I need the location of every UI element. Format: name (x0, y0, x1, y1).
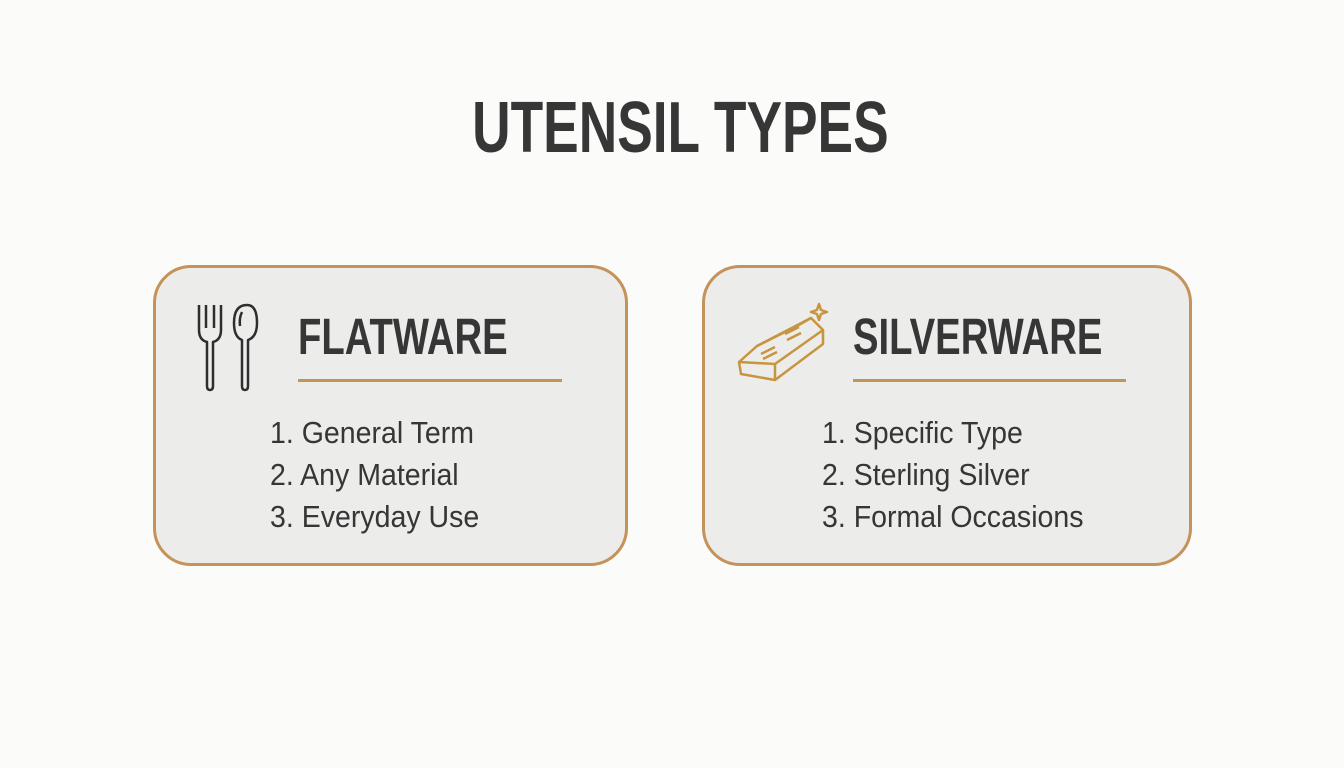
list: flatware: 1. General Term (270, 415, 474, 450)
title: UTENSIL TYPES (472, 88, 888, 168)
list: flatware (270, 415, 479, 534)
divider (853, 379, 1126, 382)
icon: fork and spoon (198, 304, 258, 392)
list: silverware: 3. Formal Occasions (822, 499, 1084, 534)
panel: flatware (153, 265, 628, 566)
list: flatware: 3. Everyday Use (270, 499, 479, 534)
list: silverware: 1. Specific Type (822, 415, 1023, 450)
list: silverware: 2. Sterling Silver (822, 457, 1030, 492)
list: silverware (822, 415, 1084, 534)
heading: silverware: SILVERWARE (853, 308, 1102, 365)
divider (298, 379, 562, 382)
icon: silver bar (738, 302, 828, 382)
heading: flatware: FLATWARE (298, 308, 508, 365)
list: flatware: 2. Any Material (270, 457, 459, 492)
panel: silverware (702, 265, 1192, 566)
